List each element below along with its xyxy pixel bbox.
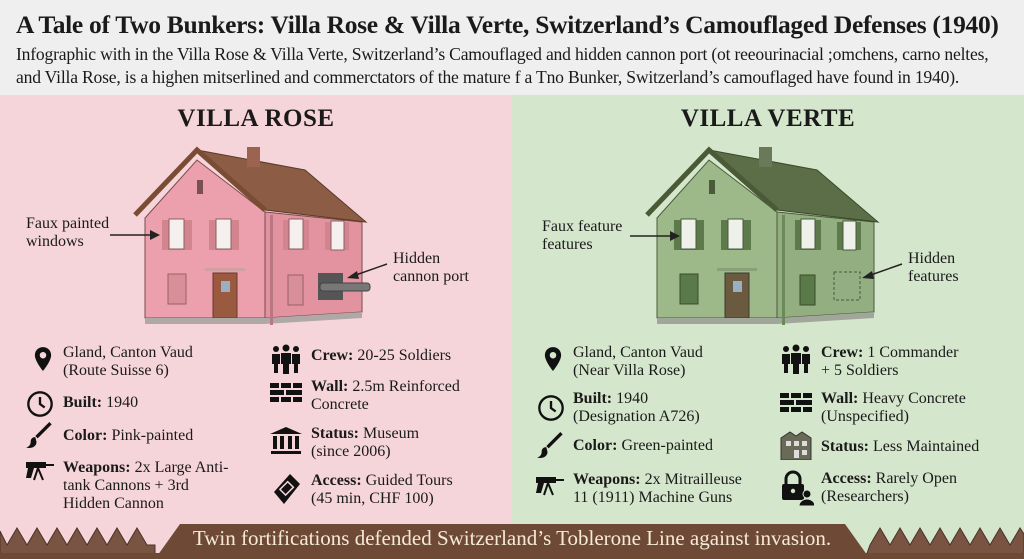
item: status: Status: Museum bbox=[311, 425, 419, 442]
item: weapons: Weapons: 2x Large Anti- bbox=[63, 459, 228, 476]
arrow: hidden features bbox=[862, 263, 902, 279]
item: wall: Wall: 2.5m Reinforced bbox=[311, 378, 460, 395]
subtitle: Infographic with in the Villa Rose & Villa Verte, Switzerland’s Camouflaged and hidden cannon port (ot reeourinacial ;omchens, carno neltes, bbox=[16, 44, 988, 64]
callout: hidden features bbox=[908, 250, 959, 285]
info list: villa rose bbox=[26, 344, 460, 512]
item: location bbox=[34, 344, 193, 379]
item: access: (Researchers) bbox=[821, 488, 909, 505]
item: weapons: Hidden Cannon bbox=[63, 495, 164, 512]
item: crew bbox=[782, 344, 958, 379]
info list: villa verte bbox=[536, 344, 980, 506]
item: weapons: 11 (1911) Machine Guns bbox=[573, 489, 732, 506]
callout: faux feature features: Faux feature bbox=[542, 218, 622, 235]
item: crew bbox=[272, 344, 451, 374]
panel: villa rose bbox=[0, 95, 512, 559]
item: wall bbox=[780, 390, 966, 425]
item: access: (45 min, CHF 100) bbox=[311, 490, 434, 507]
item: wall: Wall: Heavy Concrete bbox=[821, 390, 966, 407]
callout: faux painted windows: windows bbox=[26, 233, 84, 250]
item: built: (Designation A726) bbox=[573, 408, 700, 425]
house: villa verte bbox=[647, 147, 878, 325]
heading: villa rose: VILLA ROSE bbox=[177, 105, 335, 132]
item: access: Access: Rarely Open bbox=[821, 470, 957, 487]
item: weapons: tank Cannons + 3rd bbox=[63, 477, 189, 494]
panel: villa verte bbox=[512, 95, 1024, 559]
item: access: Access: Guided Tours bbox=[311, 472, 453, 489]
subtitle bbox=[16, 44, 988, 87]
callout: faux painted windows: Faux painted bbox=[26, 215, 109, 232]
item: color: Color: Green-painted bbox=[573, 437, 713, 454]
item: built bbox=[27, 391, 138, 417]
arrow: cannon port bbox=[347, 263, 388, 279]
arrow: faux features bbox=[630, 231, 680, 241]
item: color bbox=[537, 432, 713, 458]
callout: hidden cannon port bbox=[393, 250, 469, 285]
teeth right bbox=[865, 528, 1024, 559]
item: weapons bbox=[536, 471, 742, 506]
item: wall: Concrete bbox=[311, 396, 369, 413]
heading: villa verte: VILLA VERTE bbox=[681, 105, 855, 132]
item: location: (Near Villa Rose) bbox=[573, 362, 685, 379]
teeth left bbox=[0, 528, 155, 559]
callout: hidden cannon port: cannon port bbox=[393, 268, 469, 285]
item: status: Status: Less Maintained bbox=[821, 438, 979, 455]
callout: hidden features: Hidden bbox=[908, 250, 955, 267]
item: built: Built: 1940 bbox=[573, 390, 648, 407]
item: location: Gland, Canton Vaud bbox=[63, 344, 193, 361]
item: status bbox=[780, 432, 980, 460]
callout: faux painted windows bbox=[26, 215, 109, 250]
house: villa rose bbox=[135, 147, 370, 325]
footer text: Twin fortifications defended Switzerland’s Toblerone Line against invasion. bbox=[193, 526, 831, 550]
callout: hidden cannon port: Hidden bbox=[393, 250, 440, 267]
item: weapons bbox=[26, 459, 228, 512]
item: weapons: Weapons: 2x Mitrailleuse bbox=[573, 471, 742, 488]
title: A Tale of Two Bunkers: Villa Rose & Villa Verte, Switzerland’s Camouflaged Defenses (1940) bbox=[16, 10, 999, 39]
item: access bbox=[782, 470, 957, 506]
subtitle: and Villa Rose, is a highen mitserlined and commerctators of the mature f a Tno Bunker, Switzerland’s camouflaged have found in 1940). bbox=[16, 67, 959, 87]
item: built bbox=[538, 390, 700, 425]
footer banner bbox=[0, 524, 1024, 559]
item: status: (since 2006) bbox=[311, 443, 391, 460]
item: location: (Route Suisse 6) bbox=[63, 362, 169, 379]
header bbox=[0, 0, 1024, 95]
item: color bbox=[26, 422, 194, 448]
item: location bbox=[544, 344, 703, 379]
item: crew: Crew: 20-25 Soldiers bbox=[311, 347, 451, 364]
item: wall bbox=[270, 378, 460, 413]
item: wall: (Unspecified) bbox=[821, 408, 909, 425]
item: built: Built: 1940 bbox=[63, 394, 138, 411]
item: access bbox=[274, 472, 453, 507]
callout: faux feature features: features bbox=[542, 236, 593, 253]
item: crew: + 5 Soldiers bbox=[821, 362, 898, 379]
item: crew: Crew: 1 Commander bbox=[821, 344, 958, 361]
item: status bbox=[270, 425, 419, 460]
item: color: Color: Pink-painted bbox=[63, 427, 193, 444]
callout: faux feature features bbox=[542, 218, 622, 253]
arrow: faux windows bbox=[110, 230, 160, 240]
item: location: Gland, Canton Vaud bbox=[573, 344, 703, 361]
callout: hidden features: features bbox=[908, 268, 959, 285]
